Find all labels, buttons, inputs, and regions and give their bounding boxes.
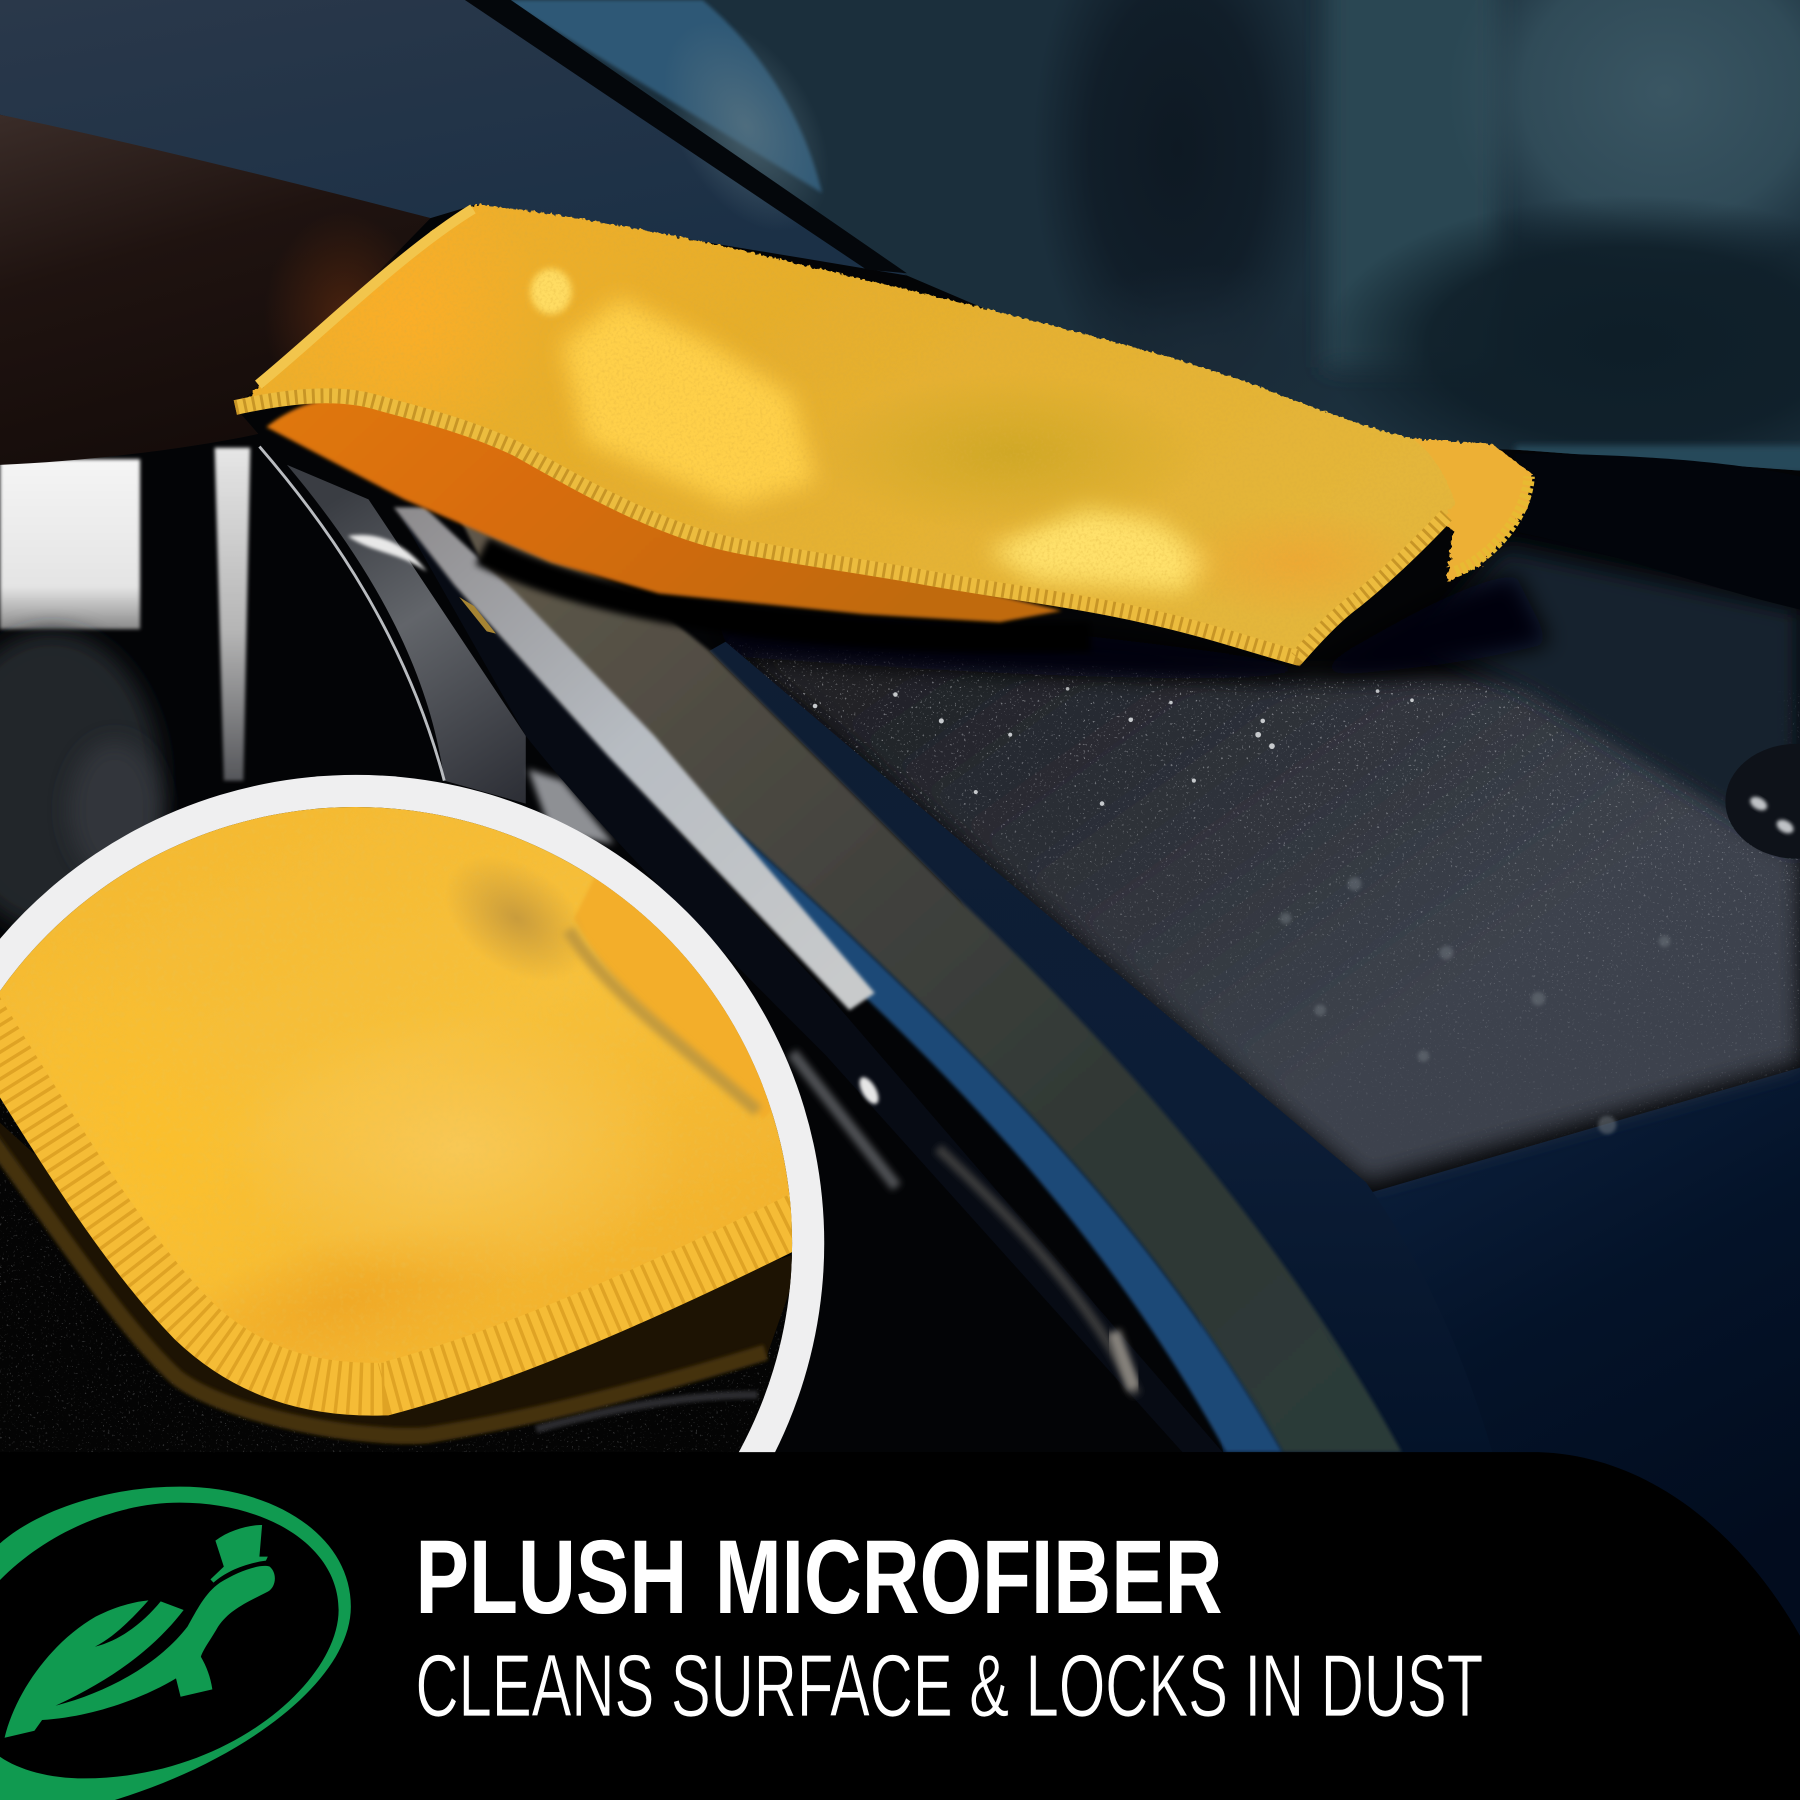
towel left seam bbox=[258, 209, 473, 385]
window view bbox=[482, 0, 1800, 494]
towel back layer bbox=[1297, 439, 1533, 582]
close-up hem bbox=[0, 1010, 804, 1389]
close-up towel shading bbox=[14, 810, 778, 1354]
gold clip bbox=[459, 597, 496, 634]
towel body bbox=[235, 204, 1456, 658]
circular vent bbox=[1725, 744, 1800, 859]
sharp dust specks bbox=[813, 687, 1414, 806]
textured dash top bbox=[712, 637, 1800, 1200]
upper-left dashboard pad bbox=[0, 0, 907, 276]
shadow below towel underside bbox=[482, 551, 1091, 638]
tan-grey trim band bbox=[459, 517, 1402, 1452]
top hat bbox=[210, 1525, 268, 1583]
navy shaded dash, upper right bbox=[1423, 546, 1800, 855]
towel cast shadow bbox=[712, 574, 1550, 678]
blurred dust spots bbox=[1164, 877, 1670, 1134]
inset ring bbox=[0, 775, 824, 1712]
inset image bbox=[0, 807, 792, 1452]
reflected hem bbox=[0, 1119, 766, 1436]
circular detail inset bbox=[0, 774, 824, 1452]
towel hem bbox=[235, 396, 1446, 658]
microfiber towel on dash bbox=[235, 172, 1538, 664]
left white glare bbox=[0, 459, 140, 629]
bright blue trim strip bbox=[540, 643, 1282, 1452]
dark navy trim band bbox=[709, 642, 1492, 1452]
turtle body bbox=[5, 1566, 275, 1738]
lower black interior details bbox=[792, 1053, 1136, 1395]
mirror edge bbox=[505, 0, 822, 193]
towel light and shade bbox=[235, 172, 1538, 664]
arm orange glow bbox=[264, 212, 425, 419]
Turtle Wax logo bbox=[0, 1487, 351, 1800]
black caption band bbox=[0, 1452, 1800, 1800]
left black interior bbox=[0, 448, 250, 930]
logo ring bbox=[0, 1487, 351, 1800]
arm bbox=[0, 115, 430, 465]
reflective vent surround bbox=[259, 447, 614, 844]
towel underside bbox=[266, 398, 1062, 622]
dash hood, right bbox=[1515, 453, 1800, 610]
fold shadow bbox=[458, 867, 572, 970]
lower navy dashboard bbox=[1148, 1033, 1800, 1800]
black trim channel bbox=[396, 507, 1223, 1452]
A-pillar black line bbox=[465, 0, 907, 273]
close-up towel body bbox=[0, 792, 815, 1389]
fold shadow line bbox=[568, 930, 758, 1111]
silver trim bbox=[394, 507, 875, 1010]
towel fold hem bbox=[1456, 476, 1529, 572]
reflected towel bbox=[0, 1102, 804, 1444]
headline: PLUSH MICROFIBER bbox=[416, 1519, 1223, 1636]
fold wedge bbox=[575, 878, 772, 1116]
arc reflection bbox=[536, 1395, 758, 1429]
